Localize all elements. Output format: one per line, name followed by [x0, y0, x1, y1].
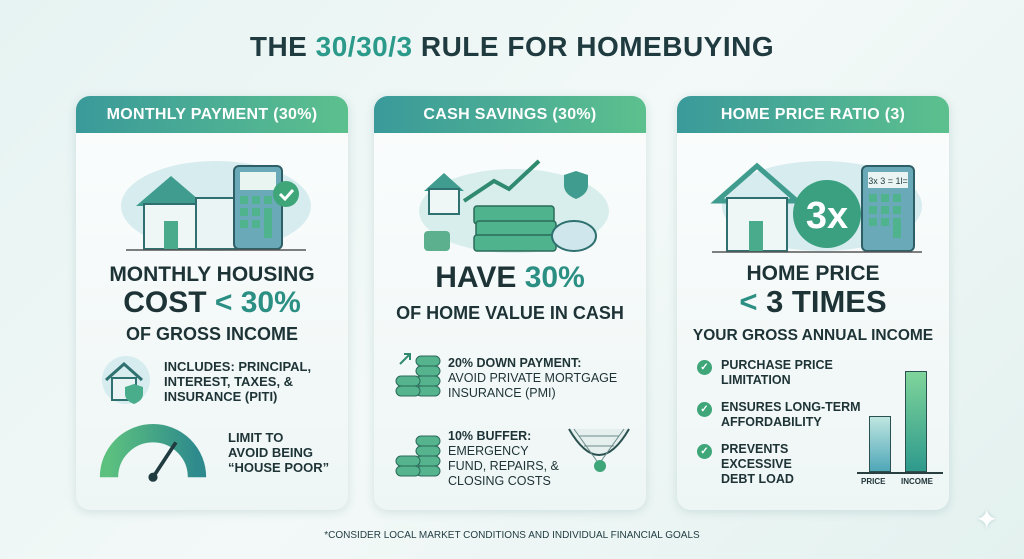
text: 10% buffer: FUND, REPAIRS, & — [448, 459, 559, 473]
bar chart: price vs income: PRICE — [861, 477, 885, 486]
text: house poor: “HOUSE POOR” — [228, 460, 329, 475]
text: house poor: AVOID BEING — [228, 445, 313, 460]
text: home price 3 times: HOME PRICE — [746, 262, 880, 285]
text: monthly housing cost: OF GROSS INCOME — [126, 324, 298, 344]
text: includes PITI — [164, 359, 311, 404]
list: benefits: ✓ — [700, 362, 709, 373]
text: 20% down payment — [448, 356, 617, 400]
list: benefits: ENSURES LONG-TERM — [721, 400, 861, 414]
icon: house 3x calculator: 3x — [806, 195, 848, 237]
text: house poor — [228, 430, 329, 475]
text: house poor: LIMIT TO — [228, 430, 283, 445]
header: home price ratio: HOME PRICE RATIO (3) — [721, 106, 905, 123]
text: have 30%: HAVE 30% — [435, 261, 585, 294]
text: monthly housing cost: COST < 30% — [123, 286, 301, 319]
bar chart: price vs income: INCOME — [901, 477, 933, 486]
panel: home price ratio — [677, 96, 949, 510]
text: home price 3 times — [693, 262, 933, 344]
text: home price 3 times: YOUR GROSS ANNUAL INCOME — [693, 327, 933, 344]
icon: house shield — [102, 356, 150, 404]
footnote: *CONSIDER LOCAL MARKET CONDITIONS AND INDIVIDUAL FINANCIAL GOALS — [324, 530, 700, 541]
header: cash savings: CASH SAVINGS (30%) — [423, 106, 597, 123]
text: monthly housing cost — [109, 263, 315, 344]
header: monthly payment: MONTHLY PAYMENT (30%) — [107, 106, 317, 123]
header: home price ratio — [677, 96, 949, 133]
header: monthly payment — [76, 96, 348, 133]
icon: safety net — [568, 428, 630, 472]
list: benefits — [697, 358, 861, 486]
icon: gauge — [100, 424, 206, 482]
list: benefits: ✓ — [700, 404, 709, 415]
text: includes PITI: INSURANCE (PITI) — [164, 389, 277, 404]
panel: monthly payment — [76, 96, 348, 510]
list: benefits: AFFORDABILITY — [721, 415, 822, 429]
text: 10% buffer: EMERGENCY — [448, 444, 529, 458]
text: includes PITI: INCLUDES: PRINCIPAL, — [164, 359, 311, 374]
icon: money and piggy bank — [419, 160, 609, 253]
list: benefits: LIMITATION — [721, 373, 791, 387]
text: 10% buffer — [448, 429, 559, 488]
list: benefits: DEBT LOAD — [721, 472, 794, 486]
panel: cash savings — [374, 96, 646, 510]
header: cash savings — [374, 96, 646, 133]
text: 20% down payment: 20% DOWN PAYMENT: — [448, 356, 581, 370]
text: 20% down payment: AVOID PRIVATE MORTGAGE — [448, 371, 617, 385]
icon: house 3x calculator: 3x 3 = 1l= — [868, 176, 908, 186]
bar chart: price vs income — [857, 371, 943, 486]
icon: house 3x calculator — [710, 161, 922, 253]
icon: coins up — [396, 353, 440, 396]
text: have 30% — [396, 261, 624, 323]
text: includes PITI: INTEREST, TAXES, & — [164, 374, 293, 389]
icon: sparkle: ✦ — [975, 504, 998, 535]
text: home price 3 times: < 3 TIMES — [739, 284, 887, 319]
text: 10% buffer: CLOSING COSTS — [448, 474, 551, 488]
text: 20% down payment: INSURANCE (PMI) — [448, 386, 556, 400]
list: benefits: PURCHASE PRICE — [721, 358, 833, 372]
text: 10% buffer: 10% BUFFER: — [448, 429, 531, 443]
list: benefits: ✓ — [700, 446, 709, 457]
title: THE 30/30/3 RULE FOR HOMEBUYING — [250, 31, 774, 62]
text: monthly housing cost: MONTHLY HOUSING — [109, 263, 315, 286]
list: benefits: EXCESSIVE — [721, 457, 792, 471]
text: have 30%: OF HOME VALUE IN CASH — [396, 303, 624, 323]
list: benefits: PREVENTS — [721, 442, 788, 456]
icon: coins — [396, 436, 440, 476]
icon: house and calculator — [121, 161, 311, 251]
